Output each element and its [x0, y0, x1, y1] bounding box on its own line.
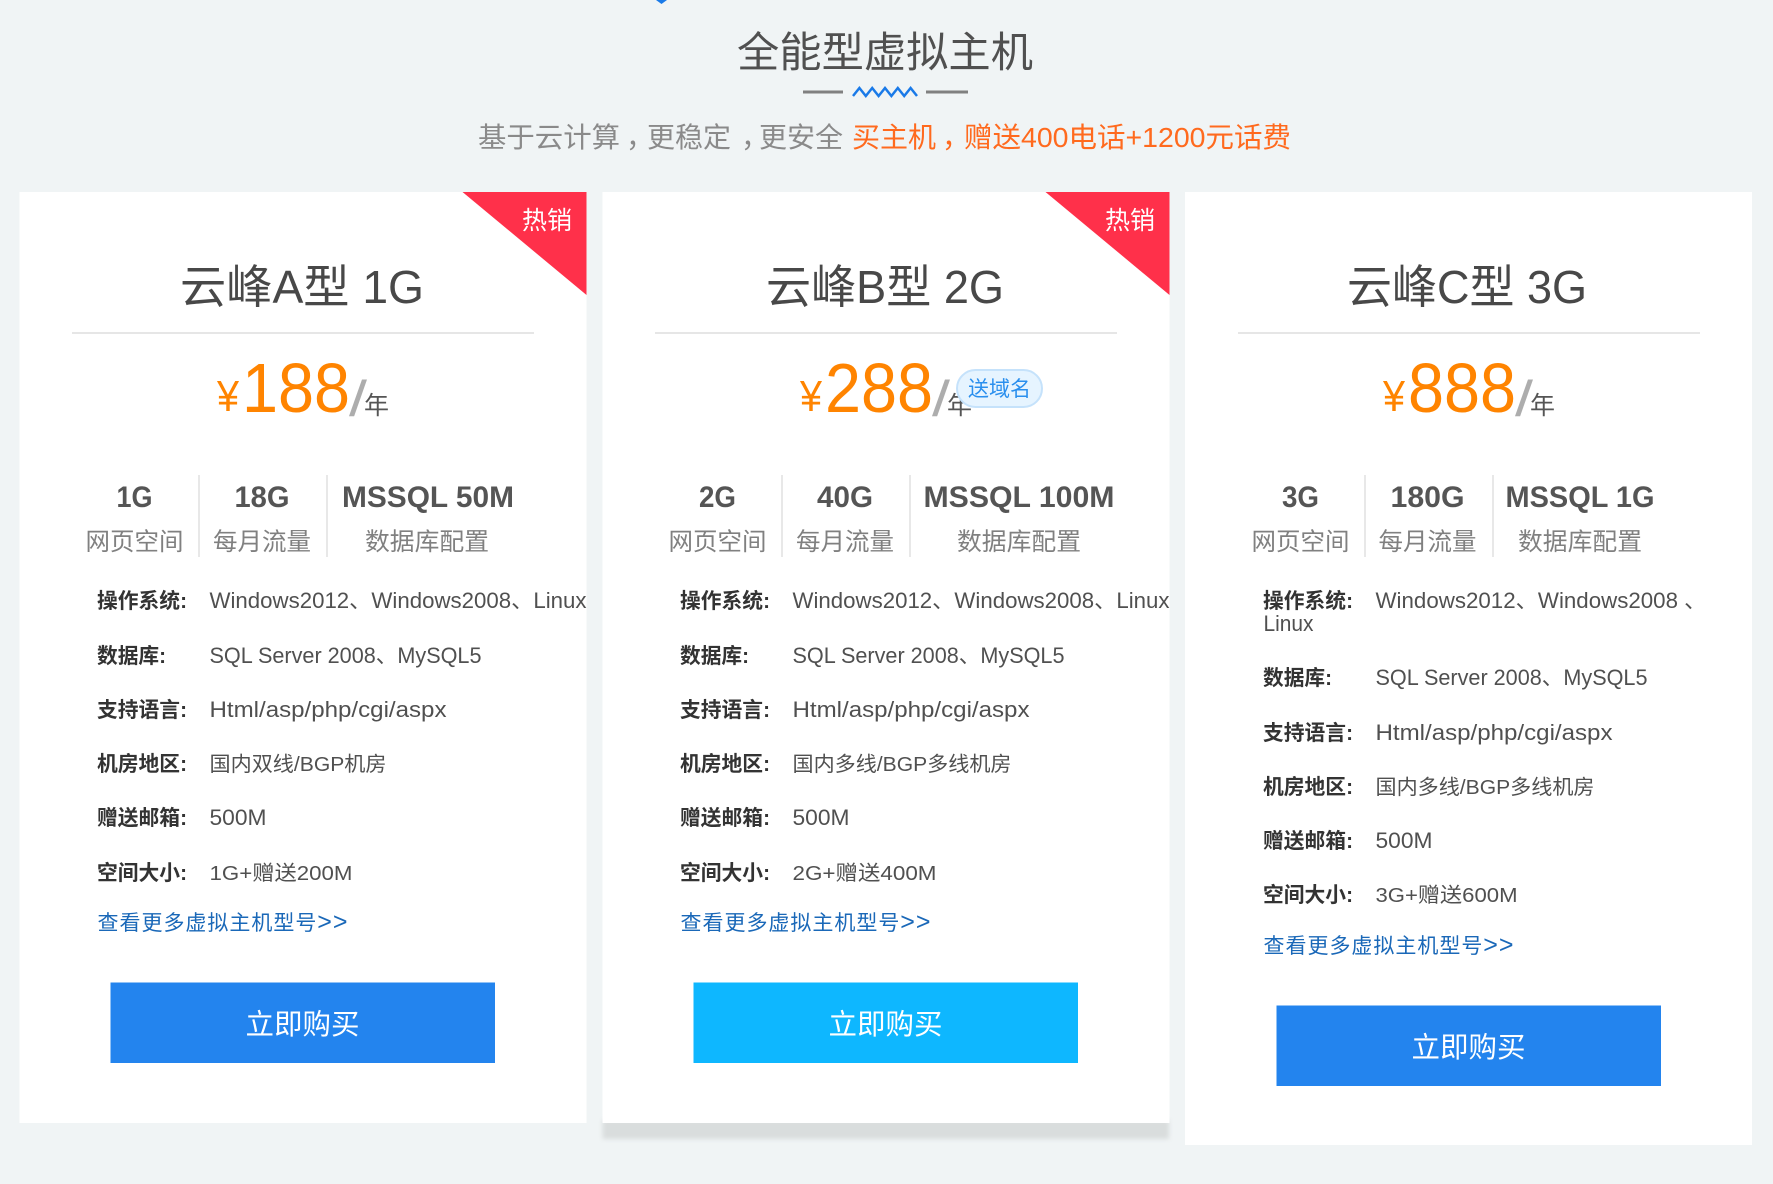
stat: database: 数据库配置: [957, 528, 1081, 556]
spec: language: 支持语言:: [97, 699, 187, 722]
stat: traffic: [1378, 481, 1476, 556]
more link: 查看更多虚拟主机型号>>: [98, 908, 348, 936]
spec: database: 数据库:: [97, 645, 166, 668]
stat: web space: 2G: [699, 481, 736, 514]
price: 188: [242, 349, 350, 427]
spec: size: 空间大小:: [97, 861, 187, 885]
more link: 查看更多虚拟主机型号>>: [680, 908, 930, 936]
stat: traffic: 180G: [1390, 481, 1464, 514]
hot ribbon: [462, 192, 586, 295]
spec: size: 2G+赠送400M: [792, 862, 936, 885]
stat: database: 数据库配置: [1518, 528, 1642, 556]
subtitle: ，: [741, 122, 769, 153]
panel: plan B: [602, 192, 1170, 1123]
spec: region: [680, 753, 1012, 776]
spec: OS: Windows2012、Windows2008 、: [1376, 588, 1706, 613]
spec: size: 空间大小:: [1263, 883, 1353, 907]
price: 年: [947, 392, 972, 420]
spec: mailbox: 500M: [1376, 828, 1432, 853]
spec: database: SQL Server 2008、MySQL5: [1376, 665, 1648, 690]
spec: language: 支持语言:: [680, 699, 770, 722]
buy button: 立即购买: [828, 1009, 942, 1041]
spec: language: Html/asp/php/cgi/aspx: [792, 697, 1030, 722]
spec: language: [680, 697, 1030, 722]
stat: database: MSSQL 50M: [342, 481, 514, 514]
price: ¥: [1382, 372, 1405, 421]
stat: database: [924, 481, 1114, 556]
plan name: 云峰A型 1G: [180, 261, 424, 313]
plan name: 云峰C型 3G: [1347, 261, 1587, 313]
spec: database: SQL Server 2008、MySQL5: [210, 643, 482, 668]
stat: traffic: [213, 481, 311, 556]
buy button: [694, 982, 1078, 1063]
price: [799, 349, 972, 427]
spec: language: Html/asp/php/cgi/aspx: [210, 697, 446, 722]
stats: [86, 475, 514, 557]
spec: OS: Windows2012、Windows2008、Linux: [210, 588, 586, 613]
card background: [20, 192, 586, 1123]
subtitle: 基于云计算: [478, 122, 620, 153]
spec: database: 数据库:: [1263, 667, 1332, 690]
subtitle: 赠送400电话+1200元话费: [964, 122, 1291, 153]
hot ribbon: 热销: [1105, 207, 1155, 235]
price: [1382, 349, 1555, 427]
subtitle: ，: [626, 122, 654, 153]
spec: mailbox: [97, 805, 266, 830]
spec: mailbox: 500M: [210, 805, 266, 830]
stat: traffic: 每月流量: [796, 528, 894, 556]
spec: size: [680, 861, 936, 885]
spec: database: [1263, 665, 1648, 690]
spec rows: [1263, 588, 1706, 907]
price: /: [932, 371, 950, 427]
stat: database: MSSQL 100M: [924, 481, 1114, 514]
spec: size: 1G+赠送200M: [210, 862, 352, 885]
spec: language: 支持语言:: [1263, 722, 1353, 745]
stat: traffic: [796, 481, 894, 556]
spec: mailbox: [1263, 828, 1432, 853]
more link: 查看更多虚拟主机型号>>: [1264, 931, 1514, 959]
stat: web space: 网页空间: [668, 528, 766, 556]
stat: web space: 3G: [1282, 481, 1319, 514]
spec: mailbox: [680, 805, 850, 830]
spec: language: [97, 697, 446, 722]
spec: OS: 操作系统:: [680, 589, 770, 613]
spec: region: 国内双线/BGP机房: [210, 753, 386, 776]
stat: web space: [1252, 481, 1350, 556]
stat: database: [342, 481, 514, 556]
spec: database: SQL Server 2008、MySQL5: [792, 643, 1064, 668]
spec: mailbox: 赠送邮箱:: [680, 807, 770, 830]
spec rows: [97, 588, 586, 885]
price: 888: [1408, 349, 1516, 427]
spec: mailbox: 赠送邮箱:: [1263, 830, 1353, 853]
spec: OS: Windows2012、Windows2008、Linux: [792, 588, 1170, 613]
spec: region: [1263, 776, 1594, 799]
spec: size: [97, 861, 352, 885]
icon: top blue marker: [656, 0, 667, 4]
price: /: [349, 371, 367, 427]
spec: region: [97, 753, 386, 776]
stat: database: MSSQL 1G: [1506, 481, 1654, 514]
panel: plan A: [20, 192, 586, 1123]
panel: plan C: [1185, 192, 1752, 1145]
price: [216, 349, 389, 427]
title divider with wave: [803, 88, 968, 96]
badge: free domain: 送域名: [968, 378, 1031, 401]
stat: traffic: 每月流量: [213, 528, 311, 556]
spec: database: [97, 643, 482, 668]
price: 年: [364, 392, 389, 420]
price: 年: [1530, 392, 1555, 420]
stat: web space: 网页空间: [86, 528, 184, 556]
stat: traffic: 40G: [817, 481, 873, 514]
spec: size: 空间大小:: [680, 861, 770, 885]
subtitle: [478, 122, 1291, 153]
stat: traffic: 每月流量: [1378, 528, 1476, 556]
stat: web space: 1G: [116, 481, 152, 514]
spec: size: 3G+赠送600M: [1376, 884, 1518, 907]
subtitle: 买主机: [852, 122, 936, 153]
buy button: [110, 982, 495, 1063]
spec: OS: Linux: [1264, 611, 1314, 636]
spec: OS: 操作系统:: [1263, 589, 1353, 613]
hot ribbon: 热销: [522, 207, 572, 235]
subtitle: 更稳定: [647, 122, 731, 153]
spec: OS: [1263, 588, 1706, 636]
stats: [1252, 475, 1654, 557]
spec: database: [680, 643, 1064, 668]
subtitle: ，: [942, 122, 970, 153]
spec: size: [1263, 883, 1518, 907]
price: /: [1515, 371, 1533, 427]
spec: region: 机房地区:: [1263, 776, 1353, 799]
hot ribbon: [1046, 192, 1170, 295]
badge: free domain: [957, 370, 1042, 407]
spec: region: 国内多线/BGP多线机房: [1376, 776, 1594, 799]
price: ¥: [799, 372, 822, 421]
buy button: 立即购买: [246, 1009, 360, 1041]
shadow under featured card: [602, 1120, 1169, 1139]
spec: database: 数据库:: [680, 645, 749, 668]
stat: traffic: 18G: [234, 481, 290, 514]
spec: region: 国内多线/BGP多线机房: [792, 753, 1012, 776]
stats: [668, 475, 1114, 557]
title: 全能型虚拟主机: [737, 29, 1033, 76]
spec: mailbox: 赠送邮箱:: [97, 807, 187, 830]
card background: [602, 192, 1170, 1123]
spec: language: Html/asp/php/cgi/aspx: [1376, 720, 1612, 745]
spec: mailbox: 500M: [792, 805, 850, 830]
stat: database: [1506, 481, 1654, 556]
price: 288: [825, 349, 933, 427]
card background: [1185, 192, 1752, 1145]
spec: language: [1263, 720, 1612, 745]
stat: web space: 网页空间: [1252, 528, 1350, 556]
buy button: 立即购买: [1412, 1032, 1526, 1064]
spec: region: 机房地区:: [680, 753, 770, 776]
stat: database: 数据库配置: [365, 528, 489, 556]
stat: web space: [668, 481, 766, 556]
spec rows: [680, 588, 1170, 885]
plan name: 云峰B型 2G: [766, 261, 1004, 313]
spec: OS: 操作系统:: [97, 589, 187, 613]
subtitle: 更安全: [759, 122, 843, 153]
stat: web space: [86, 481, 184, 556]
buy button: [1276, 1006, 1661, 1086]
price: ¥: [216, 372, 239, 421]
spec: region: 机房地区:: [97, 753, 187, 776]
header: [478, 29, 1291, 153]
